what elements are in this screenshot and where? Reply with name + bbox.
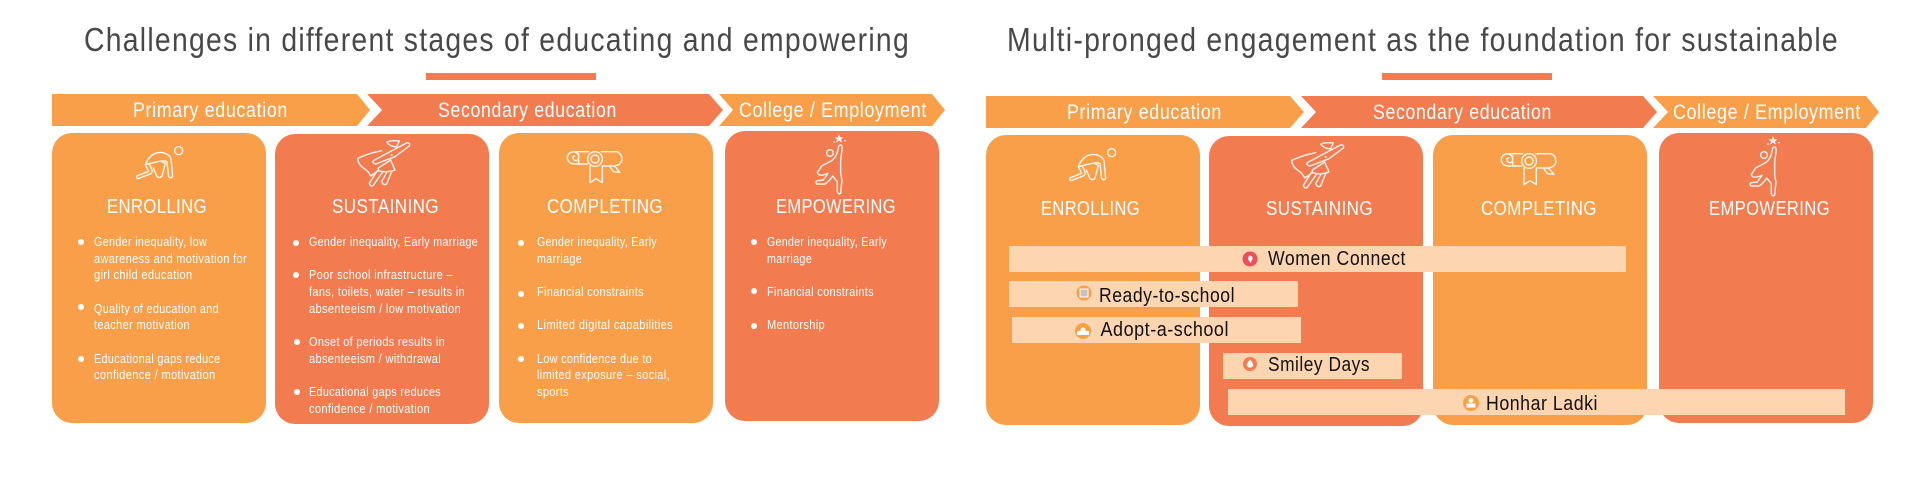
bullet list: sustaining: Educational gaps reduces <box>309 384 441 399</box>
bullet list: empowering: Mentorship <box>767 317 825 332</box>
arrow: primary education <box>986 96 1304 128</box>
bar: adopt-a-school: Adopt-a-school <box>1100 319 1229 341</box>
heading: empowering: EMPOWERING <box>776 196 896 218</box>
icon: diploma scroll <box>1501 154 1556 185</box>
bullet list: enrolling <box>78 234 247 382</box>
card: enrolling <box>986 135 1200 425</box>
icon: flying superhero <box>1292 143 1344 188</box>
bullet list: sustaining: Onset of periods results in <box>309 334 445 349</box>
bullet list: sustaining: Gender inequality, Early marriage <box>309 234 478 249</box>
bullet list: completing: Low confidence due to <box>537 351 652 366</box>
icon: crouching runner <box>1069 149 1116 181</box>
card: empowering <box>1659 133 1873 423</box>
arrow: primary education <box>52 94 370 126</box>
arrow: secondary education <box>367 94 723 126</box>
bullet list: sustaining: absenteeism / low motivation <box>309 301 461 316</box>
icon: crouching runner <box>136 147 183 179</box>
heading: completing: COMPLETING <box>547 196 663 218</box>
card: empowering <box>725 131 939 421</box>
card: completing <box>1433 135 1647 425</box>
bullet list: enrolling: teacher motivation <box>94 317 190 332</box>
icon: ready-to-school badge <box>1076 286 1092 300</box>
bullet list: completing: limited exposure – social, <box>537 367 670 382</box>
bullet list: enrolling: awareness and motivation for <box>94 251 247 266</box>
title underline <box>1382 73 1552 80</box>
bar: honhar ladki <box>1228 389 1845 415</box>
bar: smiley days <box>1223 353 1402 379</box>
bullet list: enrolling: Educational gaps reduce <box>94 351 220 366</box>
bullet list: enrolling: Gender inequality, low <box>94 234 207 249</box>
bullet list: completing: marriage <box>537 251 582 266</box>
card: sustaining <box>1209 136 1423 426</box>
icon: diploma scroll <box>567 152 622 183</box>
panel: challenges <box>52 22 945 424</box>
bullet list: sustaining: confidence / motivation <box>309 401 430 416</box>
bar: ready-to-school: Ready-to-school <box>1099 285 1235 307</box>
arrow: secondary education: Secondary education <box>1373 101 1552 124</box>
bullet list: completing: Financial constraints <box>537 284 644 299</box>
icon: honhar ladki badge <box>1463 395 1479 411</box>
bullet list: empowering: Financial constraints <box>767 284 874 299</box>
bar: ready-to-school <box>1009 281 1298 307</box>
bullet list: sustaining: Poor school infrastructure – <box>309 267 453 282</box>
bullet list: empowering: Gender inequality, Early <box>767 234 887 249</box>
icon: jumping figure reaching star <box>816 134 846 194</box>
bar: honhar ladki: Honhar Ladki <box>1486 393 1598 415</box>
arrow: primary education: Primary education <box>133 99 288 122</box>
bullet list: enrolling: confidence / motivation <box>94 367 216 382</box>
bar: women connect: Women Connect <box>1268 248 1406 270</box>
arrow: secondary education <box>1301 96 1657 128</box>
arrow: college / employment: College / Employment <box>1673 101 1861 124</box>
bullet list: empowering <box>751 234 887 332</box>
title: challenges: Challenges in different stages of educating and empowering <box>84 22 910 59</box>
bullet list: sustaining: absenteeism / withdrawal <box>309 351 441 366</box>
heading: empowering: EMPOWERING <box>1709 198 1830 220</box>
icon: adopt-a-school badge <box>1075 323 1091 339</box>
heading: completing: COMPLETING <box>1481 198 1597 220</box>
heading: enrolling: ENROLLING <box>107 196 207 218</box>
card: enrolling <box>52 133 266 423</box>
arrow: primary education: Primary education <box>1067 101 1222 124</box>
arrow: secondary education: Secondary education <box>438 99 617 122</box>
bullet list: enrolling: girl child education <box>94 267 192 282</box>
heading: sustaining: SUSTAINING <box>332 196 439 218</box>
icon: flying superhero <box>358 141 410 186</box>
panel: engagement <box>986 22 1879 426</box>
bullet list: completing: Gender inequality, Early <box>537 234 657 249</box>
bar: women connect <box>1009 246 1626 272</box>
bullet list: enrolling: Quality of education and <box>94 301 219 316</box>
icon: women connect badge <box>1242 252 1258 266</box>
bullet list: completing: Limited digital capabilities <box>537 317 673 332</box>
bullet list: completing <box>518 234 673 399</box>
card: completing <box>499 133 713 423</box>
heading: sustaining: SUSTAINING <box>1266 198 1373 220</box>
title underline <box>426 73 596 80</box>
arrow: college / employment: College / Employment <box>739 99 927 122</box>
bar: smiley days: Smiley Days <box>1268 354 1370 376</box>
arrow: college / employment <box>719 94 945 126</box>
bullet list: sustaining <box>293 234 478 416</box>
bullet list: sustaining: fans, toilets, water – results in <box>309 284 465 299</box>
heading: enrolling: ENROLLING <box>1041 198 1140 220</box>
bullet list: completing: sports <box>537 384 569 399</box>
arrow: college / employment <box>1653 96 1879 128</box>
bullet list: empowering: marriage <box>767 251 812 266</box>
icon: jumping figure reaching star <box>1750 136 1780 196</box>
bar: adopt-a-school <box>1012 317 1301 343</box>
card: sustaining <box>275 134 489 424</box>
icon: smiley days drop badge <box>1243 357 1257 371</box>
